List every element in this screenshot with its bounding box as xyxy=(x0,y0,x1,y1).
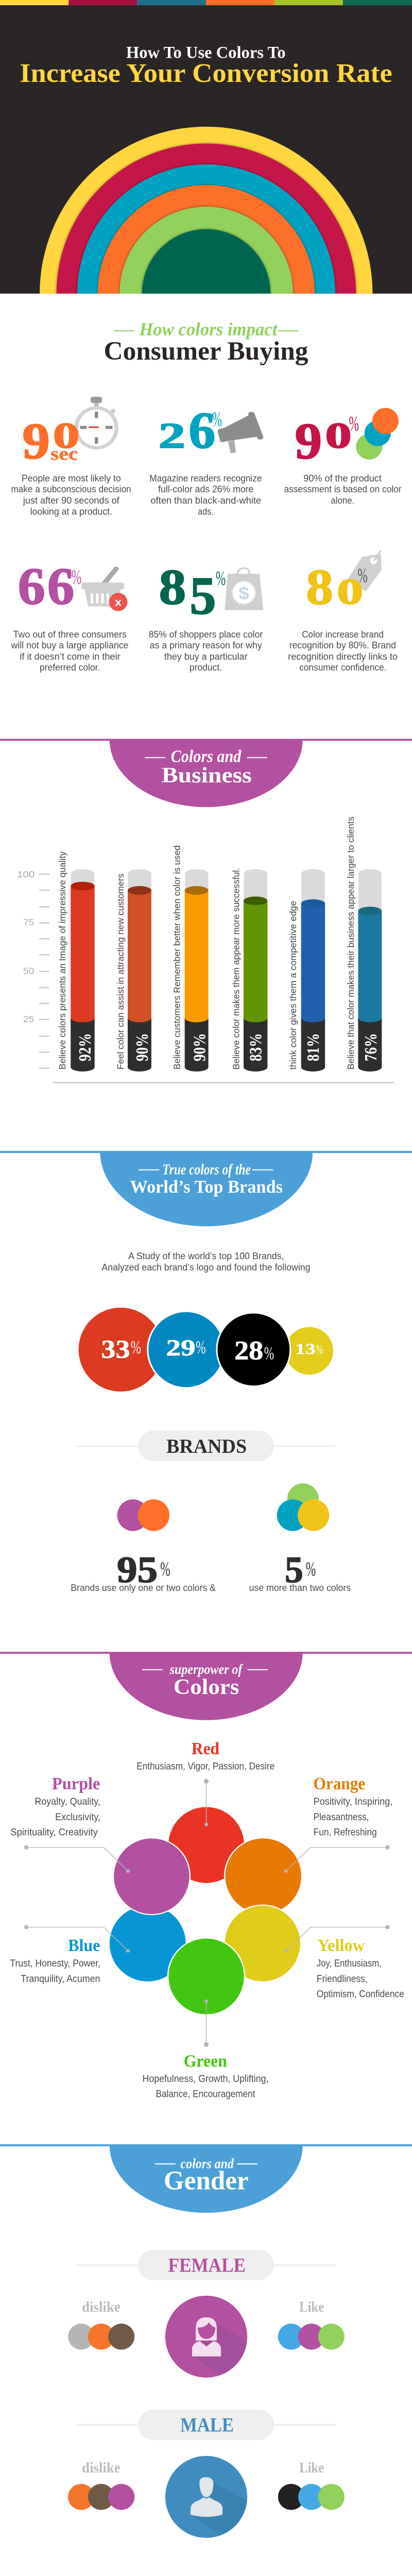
chart axis: 25 xyxy=(23,1014,34,1025)
label: blue: Trust, Honesty, Power, xyxy=(10,1958,100,1969)
stat text: 66% xyxy=(11,629,128,673)
stat: 90% xyxy=(295,412,359,469)
panel: true colors of the world's top brands xyxy=(0,1151,412,1392)
stat: 26% xyxy=(159,402,222,460)
bar: 76%: 76% xyxy=(361,1033,381,1061)
pill heading: BRANDS xyxy=(166,1436,247,1458)
icon: shopping bag xyxy=(225,568,263,610)
bar: 83% xyxy=(232,868,267,1072)
label: red: Enthusiasm, Vigor, Passion, Desire xyxy=(136,1761,274,1772)
stat: 90%: 0 xyxy=(325,416,352,455)
stat text: 90%: 90% of the product xyxy=(303,473,382,484)
stat: 13%: 13 xyxy=(295,1341,316,1358)
bar: 81% xyxy=(289,869,325,1072)
panel: header xyxy=(0,0,412,339)
intro text: Analyzed each brand’s logo and found the following xyxy=(101,1262,311,1273)
male dislike colours: dislike xyxy=(82,2460,121,2476)
stat: 28%: 28 xyxy=(234,1336,263,1365)
section banner: True colors of the xyxy=(162,1161,251,1178)
bar: 92% xyxy=(58,851,95,1072)
bar: 76% xyxy=(347,817,382,1072)
male avatar xyxy=(165,2455,247,2538)
female dislike colours: dislike xyxy=(82,2299,121,2315)
panel: consumer buying: % xyxy=(72,566,81,588)
panel: consumer buying: % xyxy=(349,412,359,435)
stat: 13% xyxy=(295,1341,323,1358)
title xyxy=(20,43,392,88)
stat: 5%: use more than two colors xyxy=(249,1583,351,1593)
stat: 90%: 9 xyxy=(295,412,322,469)
icon: basket xyxy=(81,569,127,611)
stat: 29%: % xyxy=(196,1337,205,1358)
section banner xyxy=(0,739,412,807)
stat text: 80% xyxy=(288,629,398,673)
rainbow xyxy=(40,127,373,294)
stat text: 85%: product. xyxy=(190,662,222,673)
stat: 85%: 8 xyxy=(159,560,186,615)
stat text: 85% xyxy=(149,629,263,673)
chart axis: 75 xyxy=(23,918,34,928)
female like colours: Like xyxy=(299,2299,324,2315)
bar: 83%: Believe color makes them appear more successful. xyxy=(232,868,242,1070)
panel: male and spending banner xyxy=(68,2410,345,2538)
stat: 95%: Brands use only one or two colors & xyxy=(71,1583,216,1593)
stat: 29%: 29 xyxy=(166,1335,196,1360)
stat text: 26%: full-color ads 26% more xyxy=(158,484,253,495)
icon: two colors xyxy=(117,1499,169,1531)
label: red: Red xyxy=(192,1739,219,1758)
label: blue: Tranquility, Acumen xyxy=(21,1973,100,1984)
label: purple: Royalty, Quality, xyxy=(35,1796,100,1807)
stat text: 26%: Magazine readers recognize xyxy=(149,473,262,484)
stat: 26%: 2 xyxy=(159,416,185,455)
section subtitle: how colors impact: How colors impact xyxy=(139,319,278,340)
section banner: superpower of colors xyxy=(0,1652,412,1720)
pill heading xyxy=(76,1431,336,1461)
stat: 80% xyxy=(306,560,363,615)
label: green: Balance, Encouragement xyxy=(156,2089,255,2099)
stat text: 26% xyxy=(149,473,262,517)
label: yellow: Friendliness, xyxy=(317,1973,368,1984)
chart axis: 50 xyxy=(23,966,34,976)
stat: 33%: % xyxy=(131,1337,141,1358)
icon: price tag: % xyxy=(357,565,368,587)
icon: megaphone xyxy=(217,414,260,453)
label: yellow xyxy=(317,1936,404,1999)
female like colours xyxy=(278,2299,345,2350)
label: orange: Pleasantness, xyxy=(314,1811,369,1822)
label: purple: Purple xyxy=(52,1774,100,1793)
male dislike colours xyxy=(68,2460,134,2510)
icon: price tag xyxy=(347,550,382,591)
stat text: 90 sec xyxy=(11,473,131,517)
female dislike colours xyxy=(68,2299,134,2350)
stat text: 90 sec: looking at a product. xyxy=(30,506,112,517)
stat text: 66%: will not buy a large appliance xyxy=(11,640,128,651)
stat text: 85%: they buy a particular xyxy=(164,651,248,662)
logo colour share circles xyxy=(79,1308,333,1392)
label: yellow: Joy, Enthusiasm, xyxy=(317,1958,382,1969)
panel: colors and business xyxy=(0,739,412,1083)
section banner xyxy=(0,1151,412,1226)
label: orange: Orange xyxy=(314,1774,365,1793)
label: green: Green xyxy=(184,2052,227,2071)
bar: 83%: 83% xyxy=(246,1033,265,1061)
label: purple xyxy=(10,1774,100,1838)
stat text: 90 sec: People are most likely to xyxy=(22,473,121,484)
bar: 90% xyxy=(116,869,152,1072)
stat text: 85%: as a primary reason for why xyxy=(150,640,262,651)
icon: three colors xyxy=(277,1483,329,1531)
bar: 90%: 90% xyxy=(190,1033,209,1061)
stat text: 90 sec: just after 90 seconds of xyxy=(23,495,119,506)
stat text: 80%: consumer confidence. xyxy=(299,662,387,673)
stat: 5%: 5 xyxy=(285,1549,303,1590)
panel: consumer buying: % xyxy=(212,408,222,431)
icon: basket: x xyxy=(115,596,122,608)
section banner: superpower of colors: Colors xyxy=(174,1675,239,1699)
stat text: 90% xyxy=(284,473,402,506)
stat: 90 sec: 9 xyxy=(22,412,50,469)
stat: 85%: 5 xyxy=(190,566,216,625)
bar: 90%: Feel color can assist in attracting new customers xyxy=(116,873,126,1070)
stat text: 80%: Color increase brand xyxy=(302,629,384,640)
panel: consumer buying xyxy=(11,337,402,673)
stat text: 66%: if it doesn’t come in their xyxy=(20,651,121,662)
bar: 81%: 81% xyxy=(303,1033,323,1061)
stat: 95%: 95 xyxy=(117,1549,158,1590)
label: orange: Fun, Refreshing xyxy=(314,1827,377,1838)
icon: stopwatch xyxy=(74,397,118,450)
stat: 90 sec xyxy=(22,412,79,469)
title: How To Use Colors To xyxy=(126,43,286,62)
bar: 76%: Believe that color makes their business appear larger to clients xyxy=(347,817,356,1070)
bar: 81%: think color gives them a competitive edge xyxy=(289,901,298,1070)
pill heading: male xyxy=(76,2410,336,2440)
bar: 90% xyxy=(173,845,209,1072)
male like colours xyxy=(278,2460,345,2510)
stat text: 66%: preferred color. xyxy=(40,662,100,673)
stat text: 26%: often than black-and-white xyxy=(150,495,261,506)
stat text: 90%: alone. xyxy=(331,495,354,506)
bar: 92%: Believe colors presents an Image of impressive quality xyxy=(58,851,67,1070)
label: green: Hopefulness, Growth, Uplifting, xyxy=(143,2073,268,2084)
panel: colors and gender xyxy=(0,2052,412,2387)
female avatar xyxy=(165,2296,247,2378)
section banner xyxy=(0,2144,412,2213)
panel: consumer buying: % xyxy=(216,567,226,589)
label: orange xyxy=(314,1774,392,1838)
stat: 33%: 33 xyxy=(101,1335,130,1363)
panel: superpower of colors xyxy=(10,1739,404,2047)
label: blue: Blue xyxy=(68,1936,100,1955)
stat: 80%: 8 xyxy=(306,560,333,615)
section banner: World’s Top Brands xyxy=(130,1177,283,1197)
connector lines xyxy=(24,1779,390,2047)
colour strip xyxy=(0,0,412,5)
stat: 90 sec: sec xyxy=(50,444,78,464)
stat text: 85%: 85% of shoppers place color xyxy=(149,629,263,640)
section banner: superpower of colors: superpower of xyxy=(169,1662,244,1677)
stat: 95% xyxy=(71,1549,216,1593)
stat: 95%: % xyxy=(160,1558,170,1580)
label: green xyxy=(143,2052,268,2099)
pill heading: female xyxy=(76,2250,336,2280)
label: purple: Exclusivity, xyxy=(55,1811,100,1822)
chart axis: 100 xyxy=(17,870,35,880)
stat: 66%: 6 xyxy=(47,557,74,616)
bar: 90%: Believe customers Remember better when color is used xyxy=(173,845,182,1070)
section banner: colors and xyxy=(181,2156,234,2172)
colour flower xyxy=(110,1807,302,2015)
label: red xyxy=(136,1739,274,1772)
intro text: A Study of the world’s top 100 Brands, xyxy=(128,1251,284,1261)
bar: 90%: 90% xyxy=(132,1033,152,1061)
bar: 92%: 92% xyxy=(75,1033,95,1061)
stat: 28%: % xyxy=(264,1343,274,1364)
stat: 29% xyxy=(166,1335,205,1360)
pill heading: male: MALE xyxy=(180,2414,234,2436)
label: purple: Spirituality, Creativity xyxy=(10,1827,98,1838)
stat: 90 sec: 0 xyxy=(53,416,79,455)
label: yellow: Yellow xyxy=(317,1936,365,1955)
stat: 85% xyxy=(159,560,226,625)
stat: 5%: % xyxy=(306,1558,316,1580)
stat text: 66%: Two out of three consumers xyxy=(13,629,127,640)
header background xyxy=(0,5,412,294)
stat: 26%: 6 xyxy=(188,402,215,460)
male like colours: Like xyxy=(299,2460,324,2476)
intro text xyxy=(101,1251,311,1273)
stat: 13%: % xyxy=(316,1343,323,1357)
section banner: Colors and xyxy=(171,747,242,766)
stat: 80%: 0 xyxy=(337,572,363,612)
section banner: Business xyxy=(162,764,252,788)
stat text: 90 sec: make a subconscious decision xyxy=(11,484,131,495)
chart axis xyxy=(17,870,394,1083)
label: blue xyxy=(10,1936,100,1984)
section banner: Gender xyxy=(164,2166,249,2195)
stat: 66% xyxy=(18,557,81,616)
stat text: 26%: ads. xyxy=(198,506,214,517)
stat: 66%: 6 xyxy=(18,557,45,616)
icon: shopping bag: $ xyxy=(238,583,249,603)
heading: Consumer Buying xyxy=(104,337,308,366)
icon: three circles xyxy=(356,408,399,460)
pill heading: female: FEMALE xyxy=(168,2255,246,2277)
panel: brands xyxy=(0,1431,412,1720)
stat: 5% xyxy=(249,1549,351,1593)
